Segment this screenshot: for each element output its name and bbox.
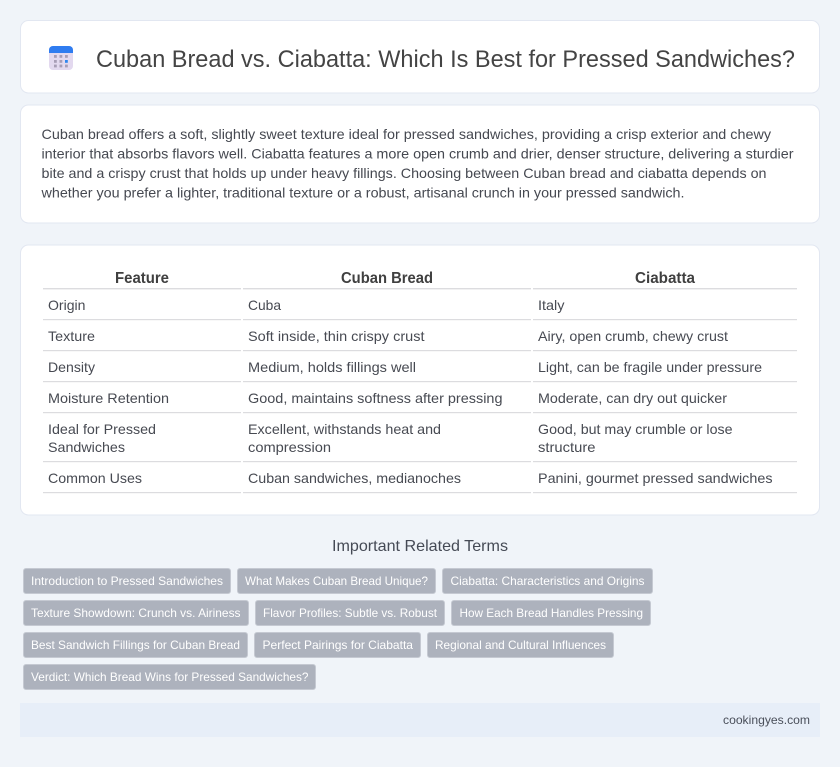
table row: texture (48, 328, 728, 344)
table row: ideal for pressed sandwiches: structure (538, 439, 596, 455)
chip (442, 568, 652, 594)
table row: moisture retention: Moderate, can dry out quicker (538, 390, 727, 406)
chip (24, 664, 316, 690)
table row: ideal for pressed sandwiches: Excellent, withstands heat and (248, 421, 441, 437)
table row: texture: Texture (48, 328, 95, 344)
title: Cuban Bread vs. Ciabatta: Which Is Best for Pressed Sandwiches? (96, 46, 795, 73)
chip: Perfect Pairings for Ciabatta (262, 638, 413, 652)
chip (238, 568, 436, 594)
table row: origin: Origin (48, 297, 86, 313)
table header: Cuban Bread (341, 270, 433, 287)
table row: origin: Italy (538, 297, 564, 313)
table row: origin (48, 297, 564, 313)
table row: ideal for pressed sandwiches: Sandwiches (48, 439, 125, 455)
chip: Introduction to Pressed Sandwiches (31, 574, 223, 588)
chip (24, 632, 248, 658)
table row: moisture retention: Good, maintains softness after pressing (248, 390, 502, 406)
heading: related terms: Important Related Terms (332, 538, 508, 555)
table row: origin: Cuba (248, 297, 281, 313)
text block: description: interior that absorbs flavors well. Ciabatta features a more open crumb and drier, denser structure, delivering a sturdier (42, 146, 794, 162)
chip: Ciabatta: Characteristics and Origins (450, 574, 644, 588)
panel: header (20, 20, 820, 93)
chip: What Makes Cuban Bread Unique? (245, 574, 428, 588)
table row: common uses: Panini, gourmet pressed sandwiches (538, 470, 772, 486)
table row: texture: Soft inside, thin crispy crust (248, 328, 425, 344)
chip: Verdict: Which Bread Wins for Pressed Sandwiches? (31, 670, 309, 684)
table row: density (48, 359, 762, 375)
icon: calendar (49, 46, 73, 70)
table header: Ciabatta (635, 270, 695, 287)
table row: density: Density (48, 359, 95, 375)
table row: ideal for pressed sandwiches: compression (248, 439, 331, 455)
table row: moisture retention (48, 390, 727, 406)
table row: common uses: Common Uses (48, 470, 142, 486)
table row: common uses: Cuban sandwiches, medianoches (248, 470, 461, 486)
footer: cookingyes.com (723, 713, 810, 727)
panel: description (20, 105, 820, 223)
table row: density: Light, can be fragile under pressure (538, 359, 762, 375)
text block: description: bite and a crispy crust that holds up under heavy fillings. Choosing between Cuban bread and ciabatta depends on (42, 165, 766, 181)
chip (428, 632, 614, 658)
text block: description: Cuban bread offers a soft, slightly sweet texture ideal for pressed sandwiches, providing a crisp exterior and chewy (42, 126, 771, 142)
chip (452, 600, 650, 626)
text block: description: whether you prefer a lighter, traditional texture or a robust, artisanal crunch in your pressed sandwich. (40, 184, 684, 200)
table row: ideal for pressed sandwiches: Good, but may crumble or lose (538, 421, 733, 437)
chip: Texture Showdown: Crunch vs. Airiness (31, 606, 240, 620)
table row: common uses (48, 470, 772, 486)
table row: ideal for pressed sandwiches: Ideal for Pressed (48, 421, 156, 437)
table row: moisture retention: Moisture Retention (48, 390, 169, 406)
chip: Regional and Cultural Influences (435, 638, 606, 652)
panel: comparison table (20, 245, 820, 515)
chip: Best Sandwich Fillings for Cuban Bread (31, 638, 240, 652)
chip (24, 568, 230, 594)
chip (256, 600, 444, 626)
related terms chips (24, 568, 652, 690)
chip (24, 600, 248, 626)
chip (254, 632, 420, 658)
footer (20, 703, 820, 737)
chip: How Each Bread Handles Pressing (460, 606, 643, 620)
text block: description (40, 126, 794, 200)
table header (115, 270, 695, 287)
chip: Flavor Profiles: Subtle vs. Robust (263, 606, 438, 620)
table row: texture: Airy, open crumb, chewy crust (538, 328, 728, 344)
table header: Feature (115, 270, 169, 287)
table row: density: Medium, holds fillings well (248, 359, 416, 375)
table row: ideal for pressed sandwiches (48, 421, 733, 455)
